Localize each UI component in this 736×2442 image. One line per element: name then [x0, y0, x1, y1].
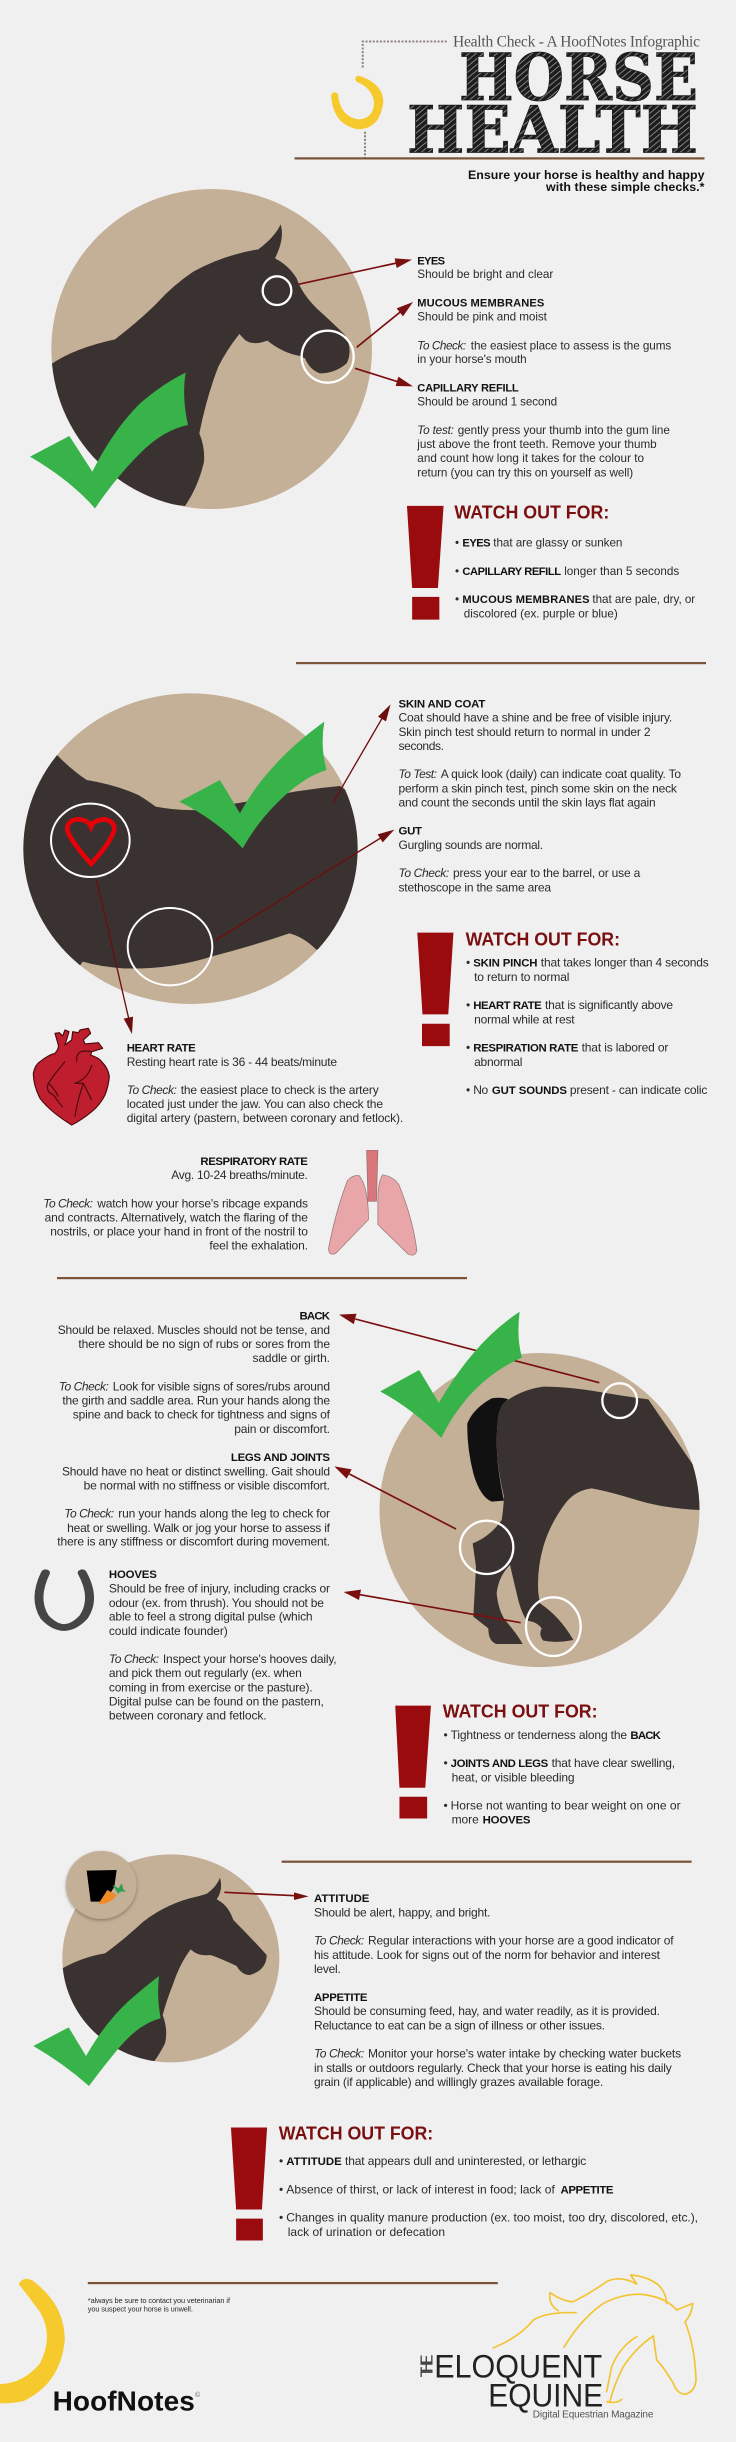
HoofNotes logo: © [195, 2391, 201, 2399]
bullets: that takes longer than 4 seconds [541, 956, 709, 970]
back: saddle or girth. [252, 1351, 330, 1365]
legs and joints: To Check: [64, 1506, 114, 1520]
icon: bucket and carrot [87, 1870, 126, 1904]
hooves: odour (ex. from thrush). You should not be [109, 1596, 324, 1610]
title: health: HEALTH [407, 92, 698, 168]
tan circle [379, 1353, 699, 1667]
bullets: • [279, 2210, 283, 2224]
text: head checks [416, 255, 671, 479]
panel: watch out 2 [417, 928, 709, 1097]
bullets: • [466, 1083, 470, 1097]
bullets: MUCOUS MEMBRANES [462, 594, 590, 606]
respiratory rate: and contracts. Alternatively, watch the flaring of the [45, 1211, 308, 1225]
arrow: skin and coat [333, 704, 391, 803]
bullets: • [455, 593, 459, 606]
eyes: Should be bright and clear [417, 268, 553, 281]
mucous membranes: To Check: [417, 339, 466, 352]
mucous membranes: the easiest place to assess is the gums [471, 339, 671, 352]
hooves: coming in from exercise or the pasture). [109, 1680, 313, 1694]
watch out heading: WATCH OUT FOR: [443, 1700, 598, 1721]
attitude: his attitude. Look for signs out of the norm for behavior and interest [314, 1948, 661, 1962]
bullets: that is significantly above [545, 998, 673, 1012]
arrow: capillary refill [355, 368, 413, 386]
icon: anatomical heart [33, 1028, 109, 1125]
respiratory rate: RESPIRATORY RATE [200, 1156, 308, 1168]
hooves: and pick them out regularly (ex. when [109, 1666, 302, 1680]
back marker [602, 1383, 637, 1418]
leg joint marker [460, 1521, 513, 1574]
appetite: Monitor your horse's water intake by checking water buckets [368, 2047, 681, 2061]
bullets: that have clear swelling, [552, 1756, 675, 1770]
icon: green check [30, 373, 188, 508]
logo wordmark [417, 2348, 654, 2420]
back: Look for visible signs of sores/rubs around [113, 1379, 330, 1393]
back: the girth and saddle area. Run your hands along the [62, 1394, 330, 1408]
bullets: normal while at rest [474, 1012, 575, 1026]
gut: stethoscope in the same area [398, 880, 551, 894]
arrow: heart rate [97, 880, 133, 1034]
bullets: Horse not wanting to bear weight on one or [451, 1799, 681, 1813]
title: horse: HORSE [459, 40, 698, 116]
heart rate [127, 1042, 403, 1125]
appetite: To Check: [314, 2047, 364, 2061]
icon: lungs [329, 1150, 417, 1255]
bullets [455, 537, 695, 620]
divider [282, 1861, 692, 1863]
tagline [468, 168, 705, 194]
heart rate: digital artery (pastern, between coronary and fetlock). [127, 1111, 403, 1125]
header [331, 33, 700, 168]
heart rate: Resting heart rate is 36 - 44 beats/minute [127, 1055, 337, 1069]
bullets: that are glassy or sunken [493, 537, 622, 550]
icon: exclamation [417, 933, 453, 1046]
tan circle [23, 693, 358, 1004]
icon: green check [380, 1312, 522, 1438]
horse silhouette [53, 1878, 267, 2062]
hooves [109, 1569, 337, 1723]
respiratory rate: Avg. 10-24 breaths/minute. [171, 1168, 308, 1182]
gut [398, 826, 641, 894]
skin and coat: perform a skin pinch test, pinch some skin on the neck [398, 781, 678, 795]
divider [296, 662, 706, 664]
panel: watch out 3 [395, 1700, 681, 1826]
capillary refill [416, 382, 670, 479]
bullets: HEART RATE [473, 1000, 542, 1012]
legs and joints: Should have no heat or distinct swelling. Gait should [62, 1464, 330, 1478]
bullets: • [466, 998, 470, 1012]
HoofNotes logo: HoofNotes [53, 2385, 195, 2416]
panel: legs illustration [39, 1312, 703, 1667]
heart rate: HEART RATE [127, 1042, 196, 1054]
legs and joints [57, 1452, 331, 1549]
text: attitude checks [314, 1893, 681, 2089]
bullets: Changes in quality manure production (ex. too moist, too dry, discolored, etc.), [286, 2210, 698, 2224]
bullets: GUT SOUNDS [492, 1085, 567, 1097]
bullets: • [466, 956, 470, 970]
attitude: level. [314, 1962, 341, 1976]
bullets: discolored (ex. purple or blue) [464, 607, 618, 620]
tagline: with these simple checks.* [545, 180, 705, 194]
skin and coat [398, 698, 681, 810]
respiratory rate: watch how your horse's ribcage expands [96, 1196, 308, 1210]
tan circle [51, 189, 372, 509]
text: legs checks [57, 1311, 337, 1723]
mucous membranes: MUCOUS MEMBRANES [417, 297, 544, 309]
gut: press your ear to the barrel, or use a [453, 866, 641, 880]
text: body checks [43, 698, 681, 1252]
appetite: Reluctance to eat can be a sign of illness or other issues. [314, 2018, 605, 2032]
icon: green check [33, 1976, 161, 2086]
bullets: EYES [462, 538, 491, 550]
bullets: ATTITUDE [286, 2156, 342, 2168]
heart rate: located just under the jaw. You can also check the [127, 1097, 383, 1111]
appetite [314, 1992, 681, 2089]
respiratory rate: nostrils, or place your hand in front of the nostril to [50, 1225, 308, 1239]
attitude: Should be alert, happy, and bright. [314, 1905, 490, 1919]
panel: attitude illustration [33, 1851, 309, 2086]
appetite: APPETITE [314, 1992, 368, 2004]
horse head silhouette [50, 224, 350, 506]
hooves: Should be free of injury, including cracks or [109, 1582, 330, 1596]
mucous membranes [417, 297, 671, 366]
back: Should be relaxed. Muscles should not be tense, and [58, 1323, 330, 1337]
bullets [444, 1728, 681, 1826]
capillary refill: Should be around 1 second [417, 396, 557, 409]
back: spine and back to check for tightness and signs of [73, 1408, 331, 1422]
bullets: • [444, 1799, 448, 1813]
skin and coat: To Test: [398, 767, 437, 781]
arrow: attitude [224, 1892, 309, 1900]
logo wordmark: EQUINE [488, 2378, 603, 2414]
capillary refill: and count how long it takes for the colour to [417, 452, 644, 465]
icon: yellow horseshoe [331, 76, 383, 129]
bullets: that are pale, dry, or [592, 593, 695, 606]
header divider [294, 157, 704, 160]
back [58, 1311, 331, 1436]
icon: exclamation [407, 506, 444, 620]
eye marker [263, 276, 291, 305]
bullets: more [452, 1812, 479, 1826]
panel: watch out 1 [407, 502, 695, 620]
watch out heading: WATCH OUT FOR: [454, 502, 609, 522]
arrow: gut [216, 830, 394, 940]
horse hindquarters silhouette [467, 1387, 703, 1644]
hooves: between coronary and fetlock. [109, 1709, 267, 1723]
bullets [279, 2154, 698, 2239]
mucous membranes: Should be pink and moist [417, 311, 548, 324]
legs and joints: be normal with no stiffness or visible discomfort. [84, 1478, 330, 1492]
capillary refill: CAPILLARY REFILL [417, 382, 519, 394]
skin and coat: Coat should have a shine and be free of visible injury. [398, 711, 672, 725]
respiratory rate: To Check: [43, 1196, 93, 1210]
tan circle [62, 1854, 279, 2062]
bullets: • [455, 565, 459, 578]
mucous membranes: in your horse's mouth [417, 353, 527, 366]
panel: watch out 4 [231, 2123, 698, 2241]
skin and coat: and count the seconds until the skin lays flat again [398, 796, 656, 810]
gut marker [128, 908, 212, 985]
arrow: eyes [298, 258, 412, 284]
bullets: JOINTS AND LEGS [451, 1758, 549, 1770]
bullets: HOOVES [483, 1814, 531, 1826]
bullets: • [279, 2154, 283, 2168]
capillary refill: return (you can try this on yourself as well) [417, 466, 633, 479]
bullets: that is labored or [582, 1040, 668, 1054]
arrow: mucous membranes [357, 302, 413, 347]
footnote: you suspect your horse is unwell. [88, 2304, 193, 2314]
bullets: heat, or visible bleeding [452, 1770, 575, 1784]
attitude: To Check: [314, 1934, 364, 1948]
heart marker [51, 804, 130, 877]
bullets: Tightness or tenderness along the [451, 1728, 627, 1742]
bullets: BACK [630, 1730, 662, 1742]
bullets: APPETITE [560, 2184, 614, 2196]
respiratory rate: feel the exhalation. [209, 1238, 308, 1252]
capillary refill: To test: [417, 424, 454, 437]
arrow: legs and joints [334, 1466, 456, 1529]
hooves: Digital pulse can be found on the pastern, [109, 1694, 324, 1708]
icon: green check [179, 722, 327, 848]
heart rate: To Check: [127, 1083, 177, 1097]
bullets: to return to normal [474, 970, 569, 984]
bullets: • [444, 1756, 448, 1770]
arrow: hooves [344, 1590, 521, 1623]
bullets: • [444, 1728, 448, 1742]
bullets: • [455, 537, 459, 550]
bullets: Absence of thirst, or lack of interest in food; lack of [286, 2182, 555, 2196]
back: BACK [300, 1311, 331, 1323]
panel: head illustration [30, 189, 413, 509]
heart rate: the easiest place to check is the artery [181, 1083, 379, 1097]
divider [57, 1277, 467, 1279]
logo wordmark: ELOQUENT [434, 2348, 602, 2384]
divider [88, 2282, 498, 2284]
gut: GUT [398, 826, 422, 838]
bullets [466, 956, 709, 1097]
capillary refill: just above the front teeth. Remove your thumb [416, 438, 657, 451]
icon: red heart outline [67, 819, 114, 864]
hooves: could indicate founder) [109, 1624, 228, 1638]
gut: To Check: [398, 866, 449, 880]
attitude: ATTITUDE [314, 1893, 370, 1905]
footnote [88, 2296, 231, 2314]
hooves: Inspect your horse's hooves daily, [163, 1652, 337, 1666]
bullets: No [473, 1083, 489, 1097]
watch out heading: WATCH OUT FOR: [466, 928, 620, 949]
icon: exclamation [395, 1706, 431, 1819]
watch out heading: WATCH OUT FOR: [279, 2123, 433, 2144]
bullets: abnormal [474, 1055, 522, 1069]
skin and coat: seconds. [398, 739, 444, 753]
eyes [417, 255, 553, 281]
bullets: RESPIRATION RATE [473, 1042, 579, 1054]
subtitle line: Health Check - A HoofNotes Infographic [453, 33, 700, 50]
bullets: present - can indicate colic [570, 1083, 707, 1097]
gut: Gurgling sounds are normal. [398, 838, 543, 852]
footnote: *always be sure to contact you veterinarian if [88, 2296, 231, 2305]
dotted hanger line [363, 42, 447, 158]
attitude: Regular interactions with your horse are a good indicator of [368, 1934, 674, 1948]
bullets: • [279, 2182, 283, 2196]
hooves: able to feel a strong digital pulse (which [109, 1610, 313, 1624]
back: there should be no sign of rubs or sores from the [78, 1337, 330, 1351]
legs scene [334, 1314, 703, 1667]
icon: grey horseshoe [39, 1573, 90, 1627]
icon: large yellow horseshoe [0, 2279, 65, 2403]
legs and joints: heat or swelling. Walk or jog your horse to assess if [67, 1521, 331, 1535]
Eloquent Equine logo [417, 2275, 696, 2420]
icon: exclamation [231, 2127, 267, 2241]
bullets: CAPILLARY REFILL [462, 566, 561, 578]
bullets: that appears dull and uninterested, or lethargic [345, 2154, 586, 2168]
appetite: Should be consuming feed, hay, and water readily, as it is provided. [314, 2004, 660, 2018]
muzzle marker [302, 331, 354, 383]
appetite: in stalls or outdoors regularly. Check that your horse is eating his daily [314, 2061, 672, 2075]
capillary refill: gently press your thumb into the gum line [458, 424, 670, 437]
legs and joints: LEGS AND JOINTS [231, 1452, 330, 1464]
feed badge [66, 1851, 137, 1919]
respiratory rate [43, 1156, 308, 1252]
bullets: lack of urination or defecation [288, 2225, 445, 2239]
skin and coat: SKIN AND COAT [398, 698, 485, 710]
panel: body illustration [10, 693, 394, 1034]
logo wordmark: Digital Equestrian Magazine [533, 2409, 654, 2420]
hooves: To Check: [109, 1652, 159, 1666]
logo wordmark: THE [417, 2354, 437, 2377]
bullets: • [466, 1040, 470, 1054]
horse barrel silhouette [10, 755, 377, 969]
attitude [314, 1893, 674, 1976]
hooves: HOOVES [109, 1569, 157, 1581]
back: To Check: [59, 1379, 109, 1393]
legs and joints: there is any stiffness or discomfort during movement. [57, 1535, 330, 1549]
bullets: SKIN PINCH [473, 958, 538, 970]
bullets: longer than 5 seconds [564, 565, 679, 578]
appetite: grain (if applicable) and willingly grazes available forage. [314, 2075, 603, 2089]
legs and joints: run your hands along the leg to check for [118, 1506, 330, 1520]
logo horse outline [493, 2275, 696, 2402]
back: pain or discomfort. [234, 1422, 330, 1436]
skin and coat: A quick look (daily) can indicate coat quality. To [441, 767, 681, 781]
tagline: Ensure your horse is healthy and happy [468, 168, 705, 182]
arrow: back [339, 1314, 599, 1383]
eyes: EYES [417, 255, 445, 267]
skin and coat: Skin pinch test should return to normal in under 2 [398, 725, 651, 739]
hoof marker [526, 1597, 581, 1656]
